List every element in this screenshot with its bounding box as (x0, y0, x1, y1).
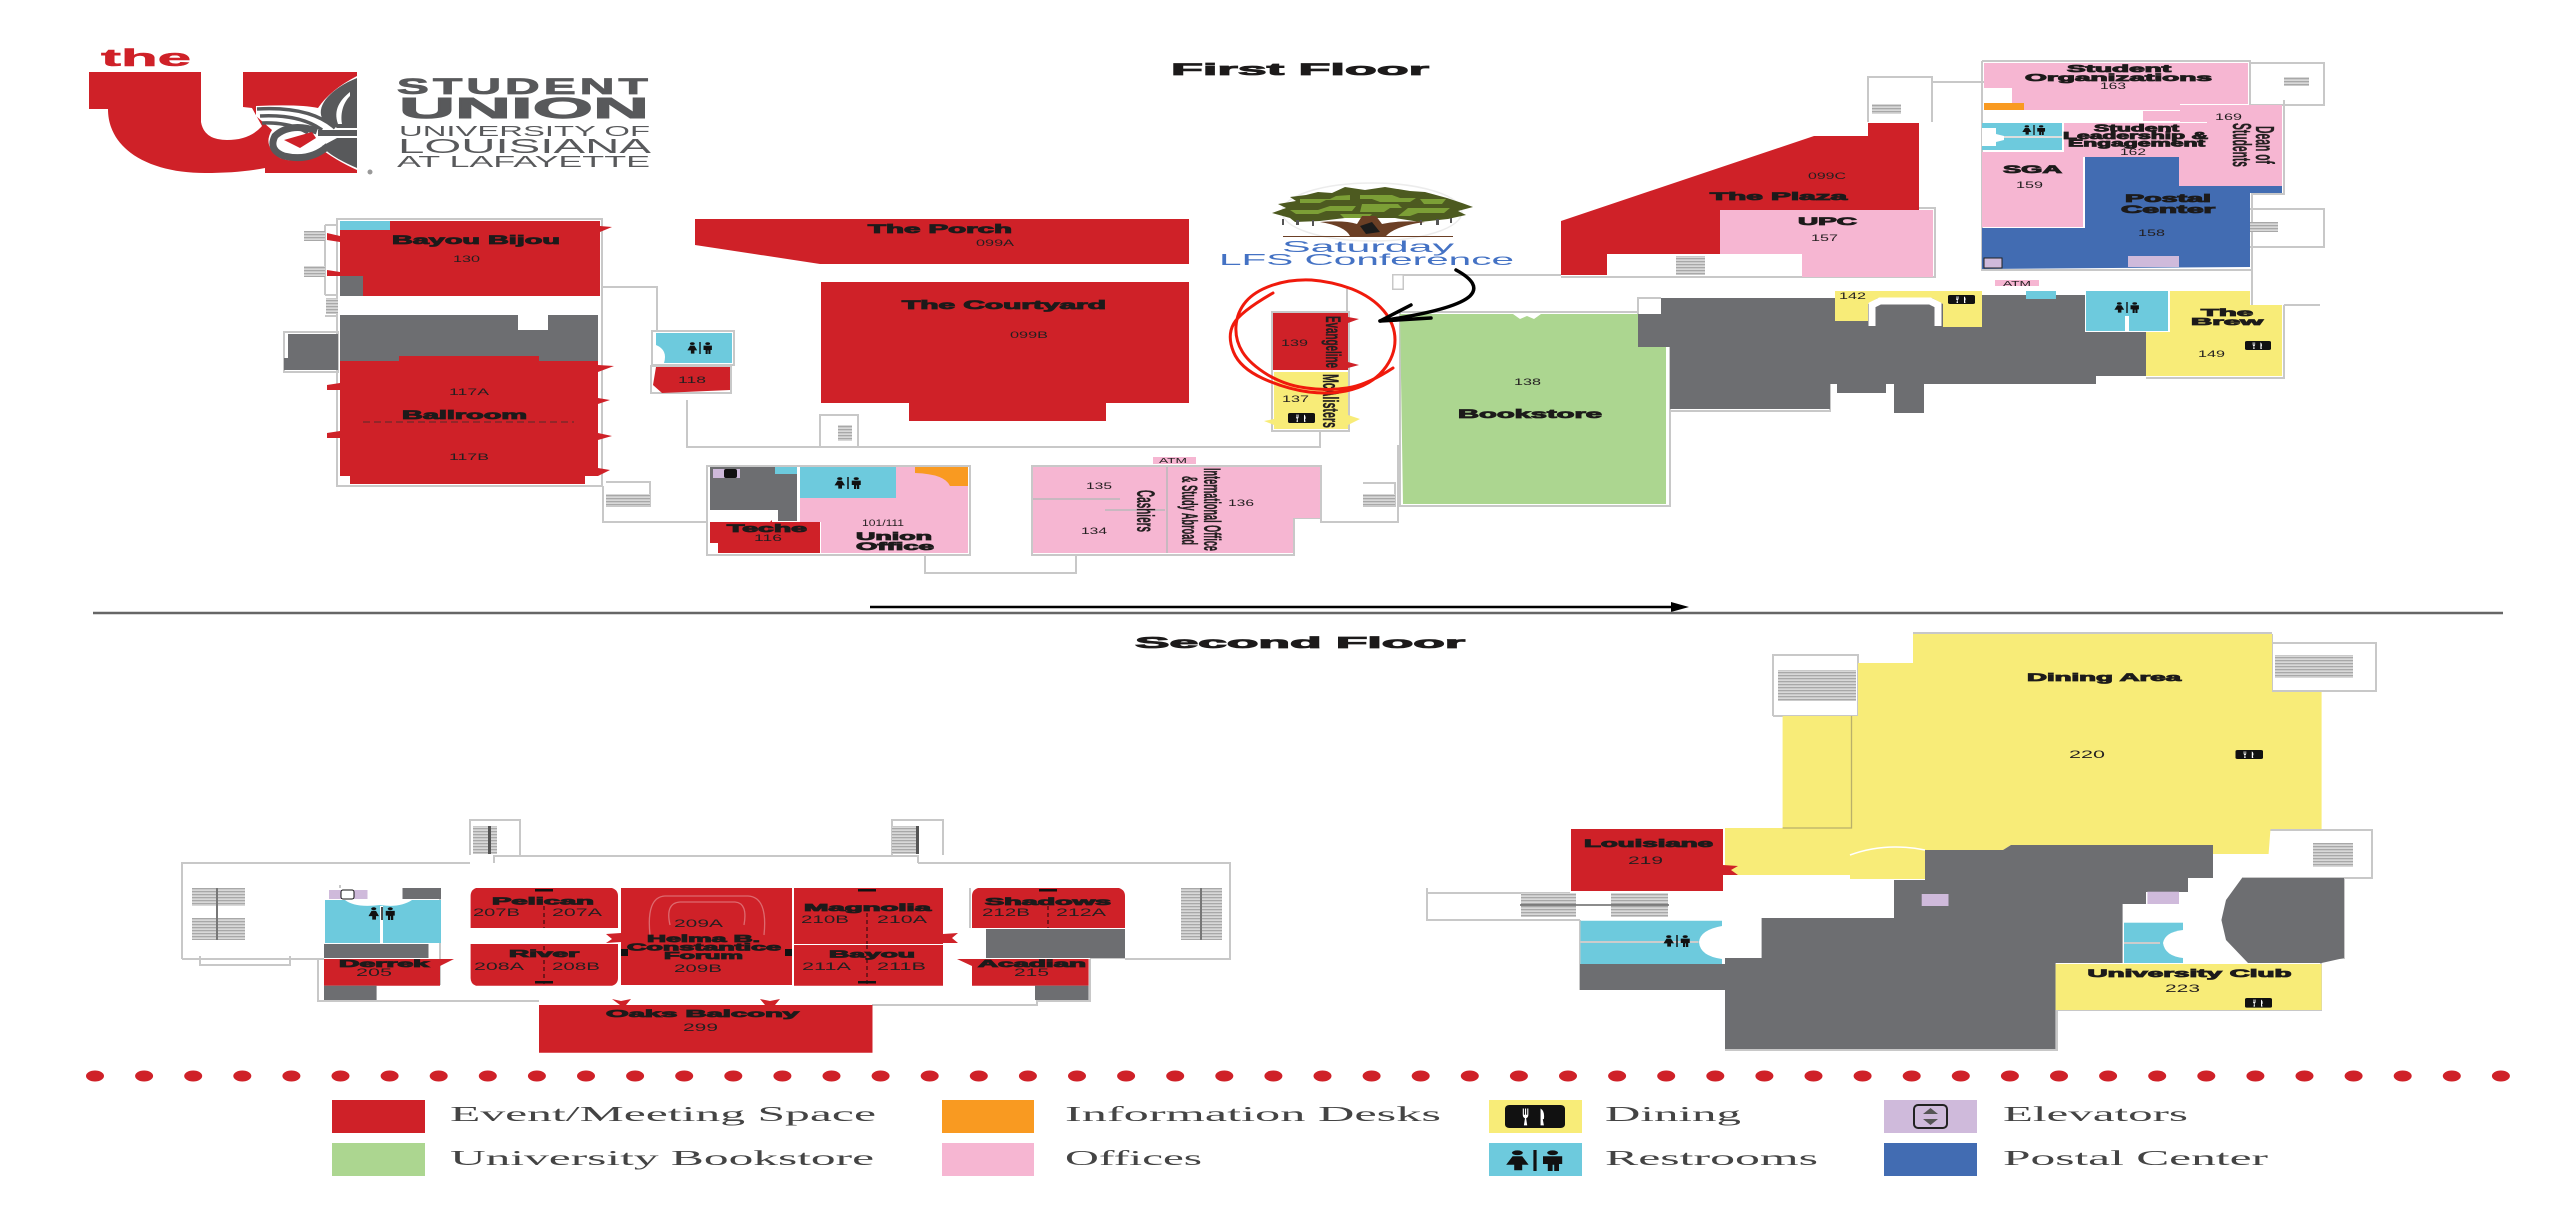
room: Postal Center 158 (1982, 157, 2282, 269)
room: Acadian 215: Acadian (978, 959, 1086, 970)
room: Bayou Bijou 130: Bayou Bijou (392, 233, 560, 247)
floor plan: first floor (284, 61, 2324, 573)
room: Teche: Teche (727, 523, 807, 535)
room: Ballroom 117A 117B: 117B (449, 452, 489, 463)
divider: black arrow between floors (870, 602, 1689, 612)
room: Bayou Bijou 130: 130 (453, 254, 480, 265)
room: University Club 223: University Club (2088, 968, 2292, 980)
room: The Plaza 099C: The Plaza (1710, 191, 1849, 203)
room: Derrek 205: 205 (356, 967, 392, 979)
text: International Office (1198, 468, 1225, 551)
divider line between floors (93, 612, 2503, 614)
room: Bayou Bijou 130 (327, 221, 612, 296)
room: University Club 223 (2056, 964, 2322, 1010)
room: Dining Area 220 (1725, 634, 2322, 879)
room: Pelican 207 (471, 888, 618, 928)
room: Bookstore 138 (1400, 314, 1666, 504)
room: Evangeline 139 (1273, 313, 1359, 370)
ATM sign east (1995, 279, 2039, 288)
room: The Plaza 099C: 099C (1808, 171, 1846, 182)
legend item: Offices (942, 1143, 1202, 1176)
room: SGA 159: SGA (2003, 164, 2062, 176)
room: Student Organizations 163: Organizations (2025, 72, 2212, 84)
room: Shadows 212: Shadows (985, 897, 1112, 908)
small restroom block and restroom by The Brew (2026, 291, 2168, 331)
floor plan: second floor west wing (182, 820, 1230, 1053)
room: UPC 157 (1720, 210, 1933, 277)
restroom and elevator block west (325, 888, 441, 943)
annotation text: Saturday LFS Conference (1219, 239, 1514, 269)
room: Oaks Balcony 299 (539, 999, 872, 1053)
elevators (2128, 256, 2179, 267)
elevators (1922, 892, 2179, 906)
room: Postal Center 158: Postal (2125, 193, 2211, 205)
room: Student Leadership and Engagement 162 (2063, 123, 2208, 158)
room: Shadows 212: 212B (982, 907, 1030, 919)
room: Ballroom 117A 117B (327, 356, 614, 484)
room: Union Office: Office (856, 541, 934, 553)
walls and stairs (1427, 633, 2376, 1050)
gray service and elevator (710, 467, 797, 521)
legend item: Information Desks: Information Desks (1065, 1102, 1441, 1126)
room: Helma B. Constantice Forum 209: 209B (674, 963, 722, 975)
room: Louisiane 219: Louisiane (1584, 838, 1713, 850)
room: The Courtyard: The Courtyard (902, 300, 1106, 312)
room: River 208: River (509, 949, 579, 960)
annotation text: Saturday LFS Conference: Saturday (1282, 239, 1454, 256)
information desk (915, 467, 968, 486)
building walls and stairs (284, 61, 2324, 573)
room: University Club 223: 223 (2165, 983, 2200, 995)
room: Bayou 211: Bayou (829, 950, 915, 960)
room: Bayou 211 (794, 945, 943, 986)
room: The Brew 149 (2146, 291, 2282, 376)
logo text: STUDENT: STUDENT (397, 74, 652, 99)
logo: the U Student Union (89, 45, 653, 174)
room: River 208: 208A (474, 961, 525, 973)
room: Ballroom 117A 117B: 117A (449, 387, 490, 398)
room: 118 (653, 367, 730, 393)
room: Magnolia 210 (794, 888, 958, 944)
legend item: Elevators: Elevators (2003, 1102, 2188, 1126)
dotted red divider (86, 1070, 2510, 1082)
room: The Courtyard (821, 282, 1189, 421)
information desk east (1984, 103, 2024, 110)
room: SGA 159 (1982, 152, 2083, 227)
room: UPC 157: UPC (1798, 216, 1857, 228)
room: River 208 (471, 944, 618, 986)
restroom east wing (1580, 921, 1722, 964)
room: Helma B. Constantice Forum 209: Constantice (627, 942, 782, 954)
floor plan: first floor: McAlisters (1318, 374, 1343, 428)
room: Pelican 207: 207B (473, 907, 520, 919)
room: Helma B. Constantice Forum 209: Helma B. (647, 934, 761, 945)
room: River 208: 208B (552, 961, 600, 973)
room: Union Office: 101/111 (862, 518, 904, 529)
room: The Porch: 099A (976, 238, 1015, 249)
legend item: Event/Meeting Space (332, 1100, 876, 1133)
room: Dean of Students 169 (2143, 105, 2282, 186)
annotation text: Saturday LFS Conference: LFS Conference (1219, 252, 1514, 269)
ATM sign east: ATM (2003, 279, 2031, 288)
room: Acadian 215: 215 (1014, 967, 1049, 979)
legend item: Postal Center: Postal Center (2003, 1146, 2268, 1170)
legend item: Restrooms (1489, 1143, 1818, 1176)
service area gray (284, 315, 598, 370)
room: Dean of Students 169: 169 (2215, 112, 2242, 123)
title: First Floor: First Floor (1171, 60, 1430, 79)
room: Student Organizations 163: Student (2067, 63, 2172, 75)
room: The Brew 149: The (2201, 307, 2253, 319)
logo text: University of: UNIVERSITY OF (399, 123, 650, 140)
floor plan: second floor east wing (1427, 633, 2376, 1050)
annotation: red hand-drawn circle (1230, 280, 1395, 393)
offices 134 135 136 cashiers international: ATM (1159, 456, 1187, 465)
room: 142 dining (1835, 291, 1982, 327)
room: 142 dining: 142 (1839, 291, 1866, 302)
room: Pelican 207: Pelican (492, 896, 594, 908)
legend item: University Bookstore: University Bookstore (450, 1146, 874, 1170)
room: Helma B. Constantice Forum 209: 209A (674, 918, 724, 930)
room: Postal Center 158: 158 (2138, 228, 2165, 239)
legend item: Restrooms: Restrooms (1605, 1146, 1818, 1170)
logo word: the: the (101, 45, 191, 72)
icon: oak tree logo (1272, 183, 1473, 241)
room: Pelican 207: 207A (552, 907, 603, 919)
room: Shadows 212 (972, 888, 1125, 928)
room: Oaks Balcony 299: Oaks Balcony (606, 1008, 799, 1020)
room: SGA 159: 159 (2016, 180, 2043, 191)
small restroom near University Club (2124, 923, 2183, 963)
logo text: Louisiana: LOUISIANA (398, 136, 653, 158)
room: The Brew 149: 149 (2198, 349, 2225, 360)
room: Bookstore 138: 138 (1514, 377, 1541, 388)
logo text: at Lafayette: AT LAFAYETTE (397, 154, 650, 171)
legend item: Elevators (1884, 1100, 2188, 1133)
room: Acadian 215 (957, 929, 1125, 1000)
room: Magnolia 210: Magnolia (804, 903, 932, 914)
room: Student Leadership and Engagement 162: Student (2094, 124, 2181, 134)
room: Magnolia 210: 210A (877, 914, 928, 926)
walls and stairs (182, 820, 1230, 1005)
room: Student Organizations 163: 163 (2100, 81, 2126, 92)
legend item: University Bookstore (332, 1143, 874, 1176)
service areas gray (1580, 845, 2344, 1049)
room: Oaks Balcony 299: 299 (683, 1022, 718, 1034)
room: The Plaza 099C (1561, 123, 1919, 275)
room: Student Leadership and Engagement 162: Engagement (2068, 138, 2207, 150)
room: Dean of Students 169: Students (2227, 123, 2257, 167)
room: Dining Area 220: Dining Area (2027, 672, 2183, 684)
room: Bayou 211: 211B (877, 961, 926, 973)
logo text: UNION: UNION (399, 93, 649, 125)
room: Student Organizations 163 (1984, 63, 2248, 110)
room: Teche (710, 520, 820, 553)
logo fleur de lis (256, 76, 372, 174)
restroom north east (1982, 123, 2062, 150)
room: Magnolia 210: 210B (801, 914, 849, 926)
offices 134 135 136 cashiers international: 134 (1081, 526, 1107, 537)
legend (332, 1100, 2268, 1176)
room: The Courtyard: 099B (1010, 330, 1048, 341)
room: Louisiane 219: 219 (1628, 855, 1663, 867)
room: Evangeline 139: 139 (1281, 338, 1308, 349)
offices 134 135 136 cashiers international: Cashiers (1131, 490, 1159, 532)
offices 134 135 136 cashiers international: 136 (1228, 498, 1254, 509)
room: Union Office (800, 467, 968, 553)
legend item: Dining: Dining (1605, 1102, 1742, 1126)
restroom near 118 (656, 333, 732, 363)
central service area gray (1638, 291, 2146, 413)
restroom (775, 467, 896, 498)
legend item: Postal Center (1884, 1143, 2268, 1176)
arrow: black hand-drawn pointer to Evangeline (1380, 270, 1474, 321)
room: Derrek 205 (324, 944, 454, 1000)
room: Teche: 116 (754, 533, 782, 544)
legend item: Information Desks (942, 1100, 1441, 1133)
room: McAlisters 137: 137 (1282, 394, 1309, 405)
room: Ballroom 117A 117B: Ballroom (402, 410, 527, 422)
floor plan: first floor: Evangeline (1321, 316, 1344, 368)
room: Helma B. Constantice Forum 209: Forum (664, 951, 743, 962)
room: Helma B. Constantice Forum 209 (606, 888, 792, 985)
legend item: Dining (1489, 1100, 1742, 1133)
legend item: Event/Meeting Space: Event/Meeting Space (450, 1102, 876, 1126)
room: The Brew 149: Brew (2191, 316, 2265, 328)
room: Louisiane 219 (1571, 829, 1738, 891)
room: Union Office: Union (856, 531, 933, 543)
room: Dean of Students 169: Dean of (2250, 126, 2280, 164)
room: Student Leadership and Engagement 162: Leadership & (2063, 131, 2208, 142)
room: UPC 157: 157 (1811, 233, 1838, 244)
room: Derrek 205: Derrek (339, 959, 430, 970)
room: The Porch (695, 219, 1189, 264)
logo U mark (89, 72, 357, 173)
room: Dining Area 220: 220 (2069, 749, 2105, 761)
offices 134 135 136 cashiers international (1033, 456, 1320, 553)
room: Postal Center 158: Center (2121, 204, 2217, 216)
title: Second Floor: Second Floor (1135, 635, 1465, 652)
room: Bayou 211: 211A (802, 961, 852, 973)
floor plan: first floor: & Study Abroad (1177, 476, 1202, 545)
room: Shadows 212: 212A (1056, 907, 1107, 919)
room: Bookstore 138: Bookstore (1458, 407, 1603, 421)
legend item: Offices: Offices (1065, 1146, 1202, 1170)
union office cluster (710, 467, 968, 553)
offices 134 135 136 cashiers international: 135 (1086, 481, 1112, 492)
room: McAlisters 137 (1264, 372, 1360, 429)
room: 118: 118 (678, 375, 706, 386)
room: Student Leadership and Engagement 162: 162 (2120, 147, 2146, 158)
room: The Porch: The Porch (868, 224, 1012, 236)
